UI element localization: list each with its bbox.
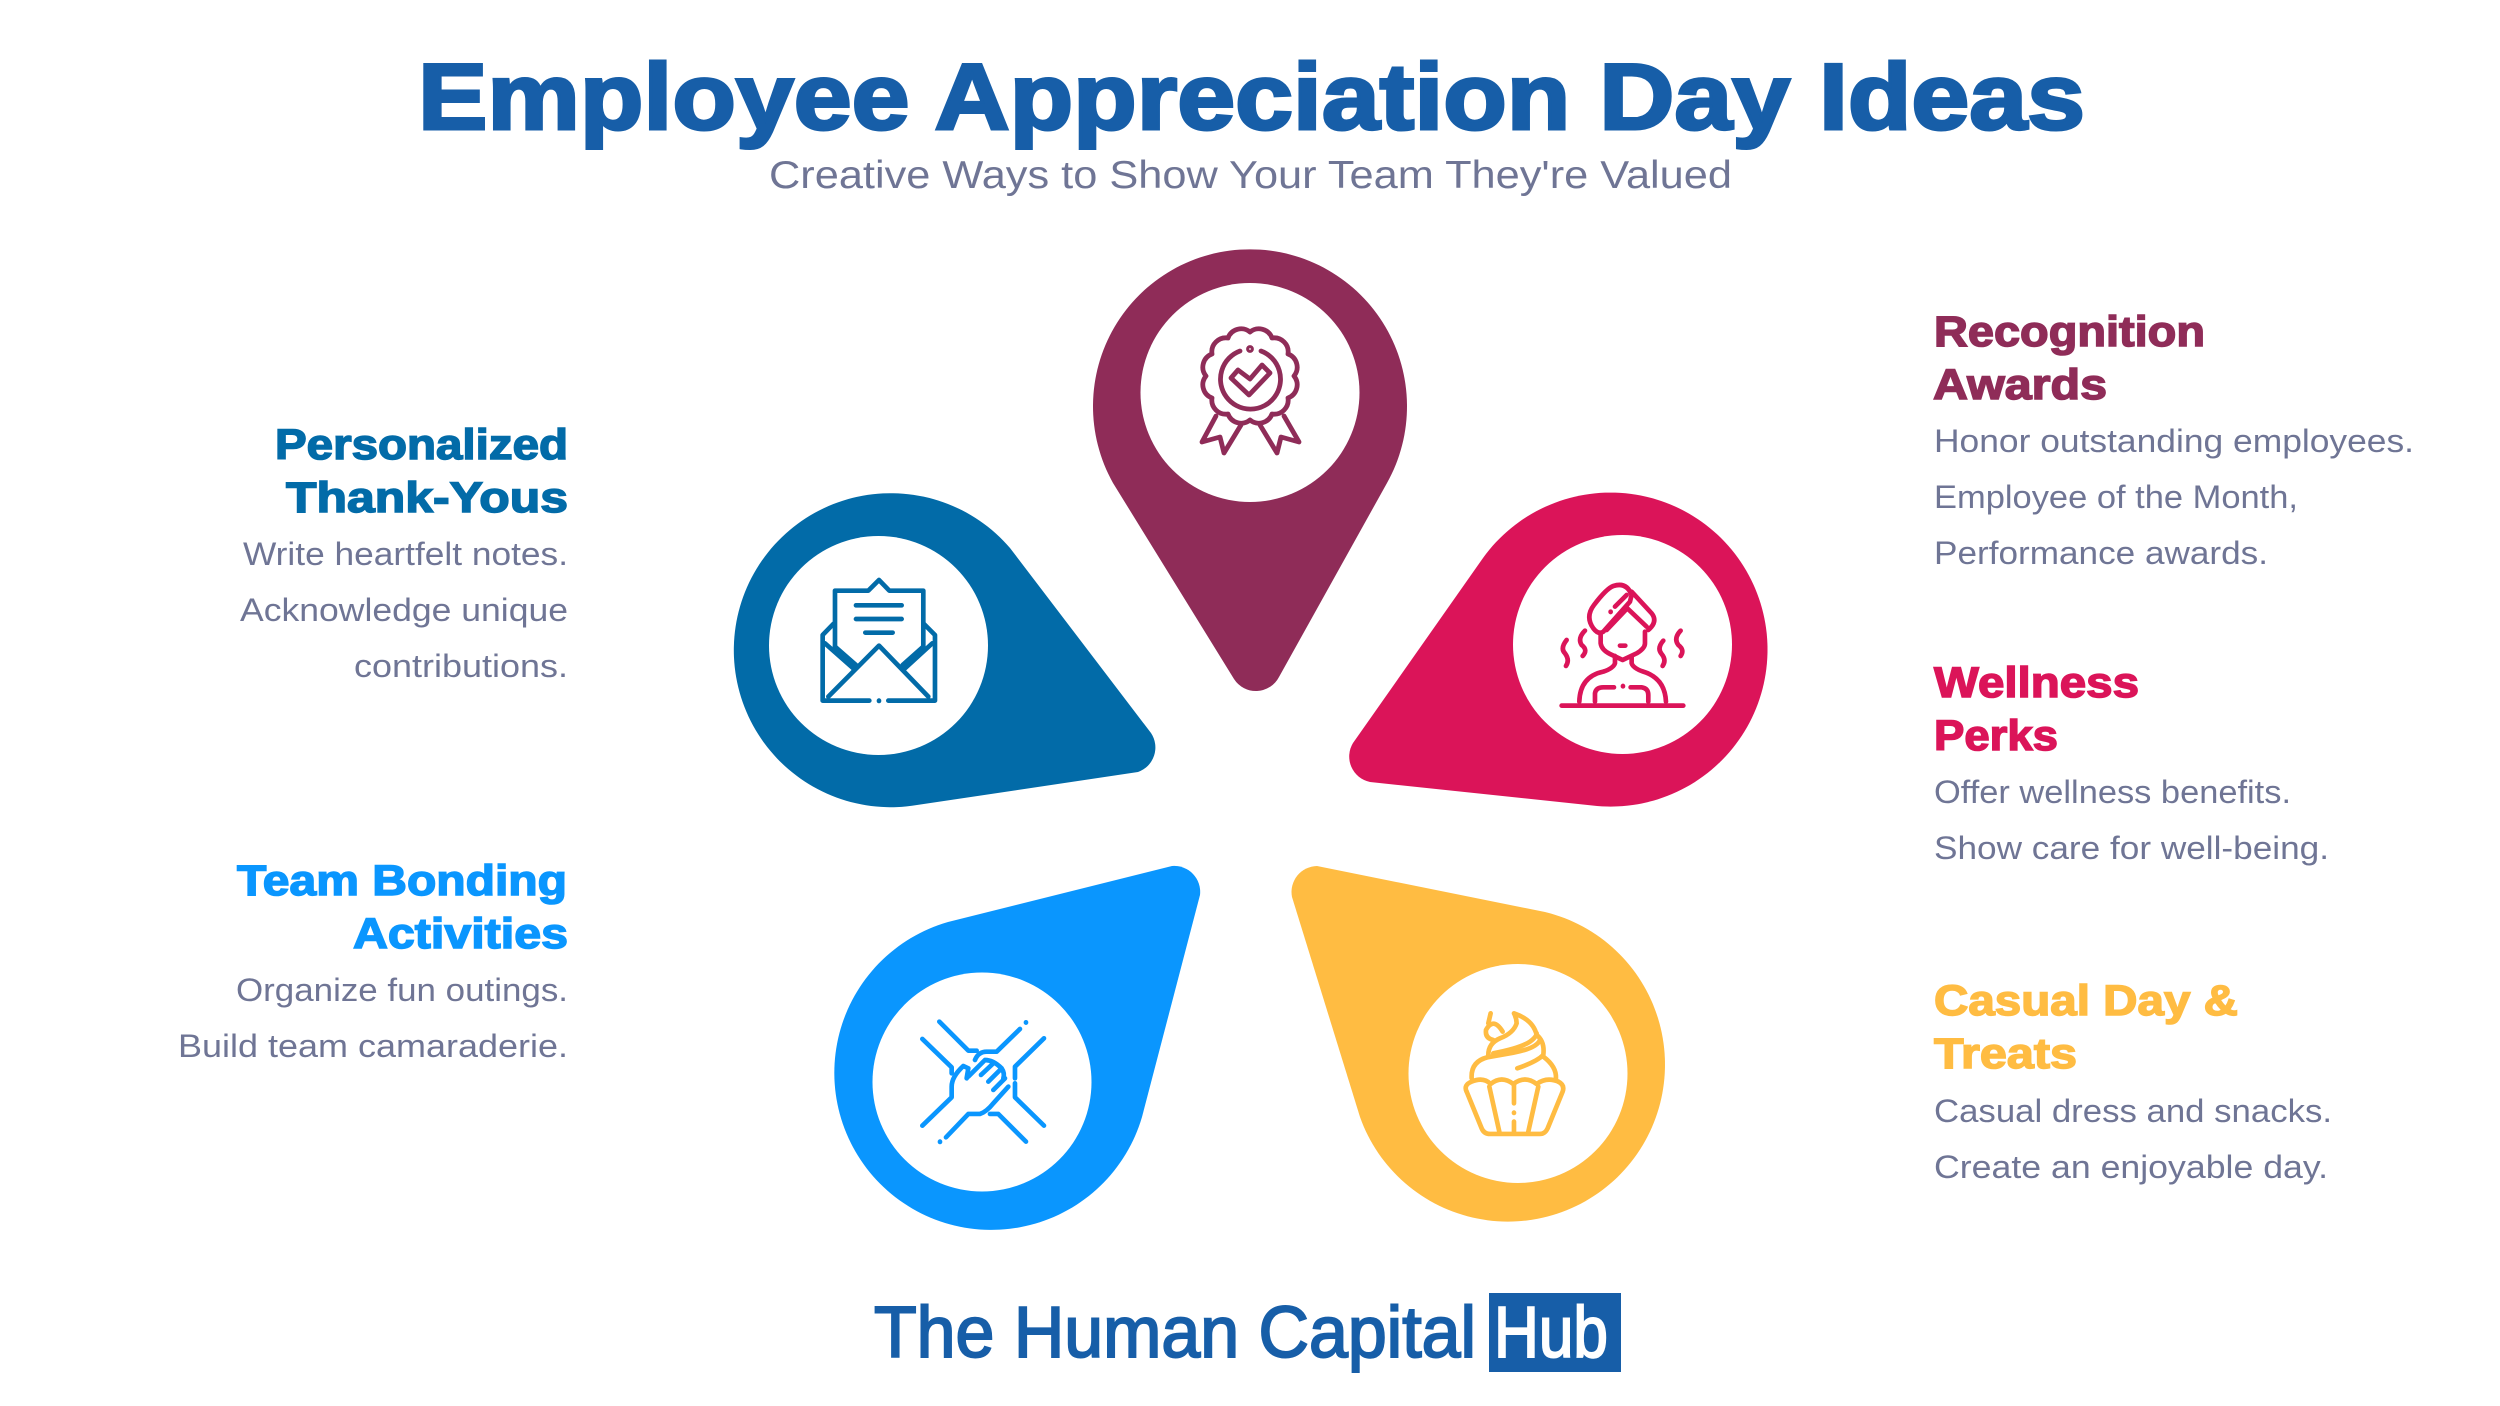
heading: Personalized (275, 421, 568, 469)
body (240, 536, 568, 684)
logo: The Human Capital Hub (874, 1293, 1621, 1373)
pin shape: pink (1349, 493, 1768, 807)
pin shape: maroon (1093, 249, 1407, 691)
heading: Treats (1934, 1030, 2077, 1078)
text block: wellness perks (1934, 659, 2329, 866)
body: Acknowledge unique (240, 592, 568, 628)
logo box text: Hub (1494, 1293, 1608, 1373)
white circle (1513, 535, 1732, 754)
pin: team bonding (834, 866, 1200, 1230)
heading: Wellness (1934, 659, 2139, 707)
heading: Recognition (1934, 308, 2205, 356)
text block: recognition awards (1933, 308, 2414, 571)
heading (1934, 659, 2139, 760)
icon: award rosette (1202, 329, 1299, 453)
pin: recognition awards (1093, 249, 1407, 691)
icon: spa person with towel (1562, 585, 1683, 706)
heading: Casual Day & (1934, 977, 2238, 1025)
heading (1934, 977, 2238, 1078)
body: Offer wellness benefits. (1934, 774, 2291, 810)
body (1934, 774, 2329, 866)
icon: cupcake (1466, 1013, 1563, 1134)
text block: team bonding (178, 857, 568, 1064)
pin: casual day and treats (1292, 866, 1665, 1222)
body: Create an enjoyable day. (1934, 1149, 2328, 1185)
pin shape: dark blue (734, 493, 1155, 807)
body: Organize fun outings. (236, 972, 568, 1008)
heading: Team Bonding (237, 857, 567, 905)
text block: casual day and treats (1934, 977, 2332, 1185)
icon: open envelope (823, 580, 935, 701)
white circle (872, 972, 1092, 1192)
title: Employee Appreciation Day Ideas (418, 44, 2085, 149)
logo box (1489, 1293, 1621, 1372)
heading (1933, 308, 2205, 409)
body (1934, 423, 2414, 571)
heading: Perks (1934, 712, 2058, 760)
icon: joined hands (922, 1022, 1044, 1142)
white circle (1408, 964, 1628, 1183)
pin: personalized thank-yous (734, 493, 1155, 807)
body (178, 972, 568, 1064)
heading (237, 857, 568, 958)
body: Casual dress and snacks. (1934, 1093, 2332, 1129)
text block: personalized thank-yous (240, 421, 568, 684)
heading: Activities (353, 910, 568, 958)
body: Performance awards. (1934, 535, 2268, 571)
heading: Thank-Yous (286, 474, 568, 522)
heading (275, 421, 568, 522)
body (1934, 1093, 2332, 1185)
body: Build team camaraderie. (178, 1028, 568, 1064)
body: Write heartfelt notes. (243, 536, 568, 572)
subtitle: Creative Ways to Show Your Team They're Valued (769, 154, 1732, 197)
pin shape: light blue (834, 866, 1200, 1230)
white circle (1140, 283, 1360, 502)
white circle (769, 536, 988, 755)
logo wordmark: The Human Capital (874, 1293, 1476, 1373)
body: Show care for well-being. (1934, 830, 2329, 866)
pin: wellness perks (1349, 493, 1768, 807)
body: Honor outstanding employees. (1934, 423, 2414, 459)
body: Employee of the Month, (1934, 479, 2298, 515)
body: contributions. (354, 648, 568, 684)
heading: Awards (1933, 361, 2107, 409)
pin shape: yellow (1292, 866, 1665, 1222)
